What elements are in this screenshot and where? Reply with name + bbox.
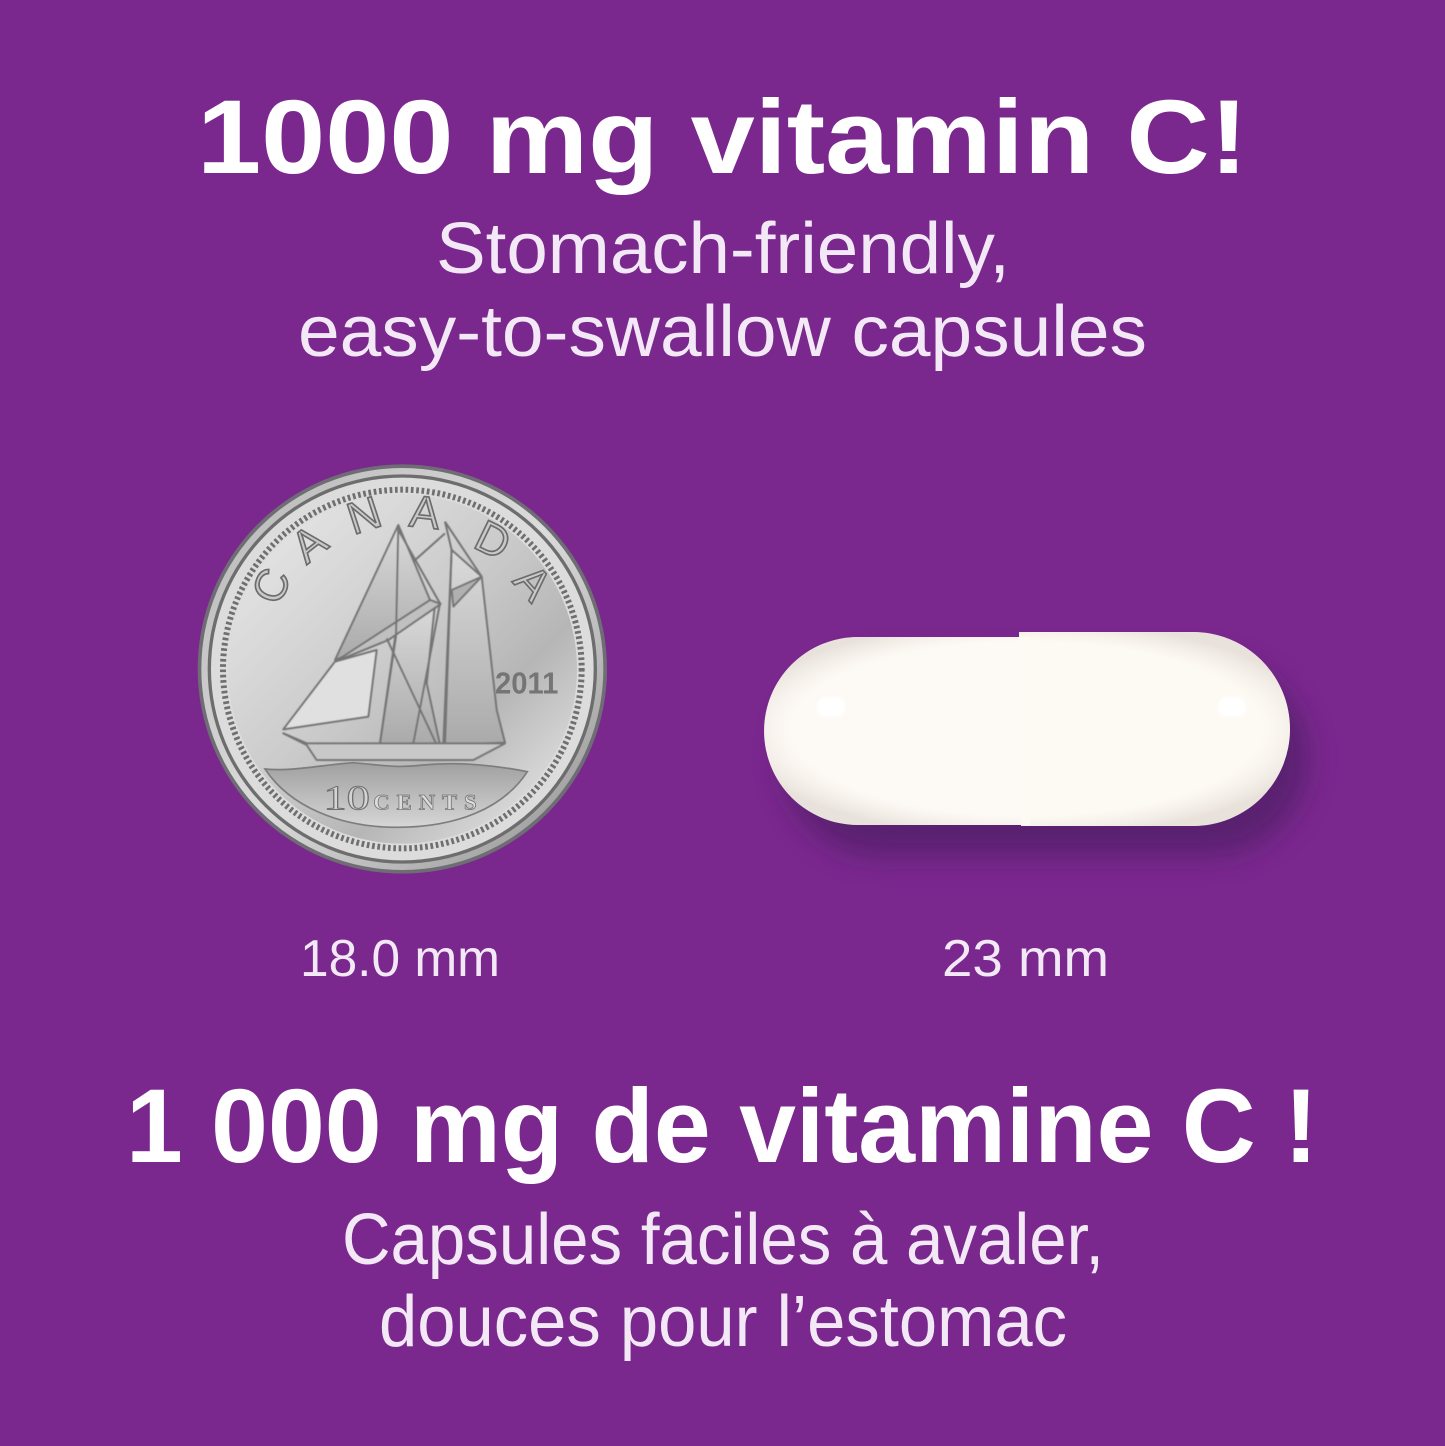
coin lettering: A [407, 485, 442, 539]
coin lettering: D [467, 510, 519, 570]
capsule body [764, 637, 1030, 825]
subheading: French: douces pour l’estomac [379, 1282, 1067, 1362]
coin lettering: C [241, 561, 301, 610]
sea and denomination: CENTS [373, 789, 477, 814]
heading: French: 1 000 mg de vitamine C ! [126, 1068, 1318, 1185]
coin lettering: A [281, 514, 336, 573]
subheading: English: Stomach-friendly, [436, 209, 1010, 289]
capsule cap [1019, 632, 1290, 826]
capsule shadow [782, 660, 1308, 856]
coin: Canadian dime [198, 464, 607, 874]
heading: English: 1000 mg vitamin C! [197, 79, 1248, 196]
subheading: English [298, 209, 1147, 372]
coin lettering: 2011 [495, 666, 558, 700]
coin size label: 18.0 mm [300, 930, 500, 988]
sea and denomination [265, 763, 527, 827]
schooner [283, 522, 505, 760]
subheading: English: easy-to-swallow capsules [298, 292, 1147, 372]
capsule [764, 632, 1308, 856]
subheading: French [342, 1200, 1104, 1362]
coin lettering: A [504, 554, 562, 611]
sea and denomination: 10 [323, 778, 370, 817]
coin lettering [241, 485, 562, 700]
coin lettering: N [341, 486, 387, 545]
subheading: French: Capsules faciles à avaler, [342, 1200, 1104, 1280]
capsule size label: 23 mm [942, 930, 1109, 988]
